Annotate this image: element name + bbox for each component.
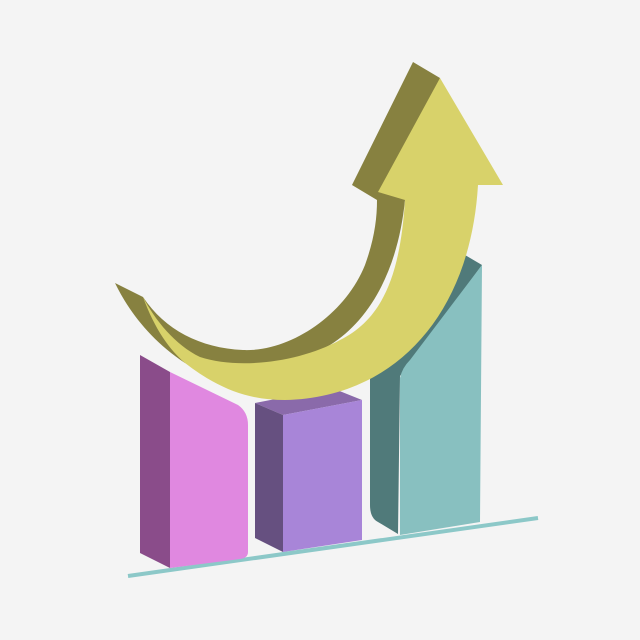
bar: teal xyxy=(370,255,482,535)
bar: purple xyxy=(255,388,362,552)
arrow: curved upward xyxy=(115,62,503,400)
bar: pink xyxy=(140,355,248,568)
baseline xyxy=(128,518,538,576)
